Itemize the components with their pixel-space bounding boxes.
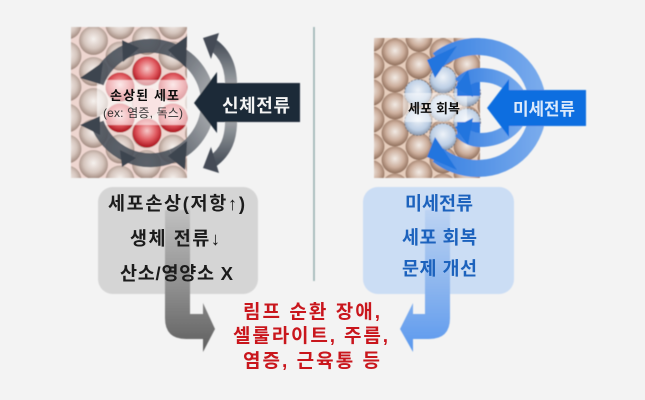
label backdrop [97, 80, 187, 125]
recovering cells [404, 66, 480, 150]
ring arrows dark [97, 46, 208, 160]
blue bands over cells [457, 82, 480, 134]
label: body current: 신체전류 [222, 96, 290, 116]
panel: damaged cell diagram [71, 27, 300, 178]
text: grey box list: 세포손상(저항↑) [108, 193, 245, 214]
panel: recovery diagram [374, 38, 586, 178]
blood flow arrow [194, 72, 300, 133]
text: red result [233, 301, 388, 372]
text: red result: 림프 순환 장애, [243, 301, 380, 323]
text: blue box list [402, 193, 477, 279]
text: grey box list [108, 193, 245, 284]
text: grey box list: 산소/영양소 X [120, 263, 234, 284]
cell lattice left [71, 27, 187, 178]
divider line [313, 27, 315, 281]
label: micro current: 미세전류 [513, 100, 575, 119]
label backdrop [403, 93, 467, 122]
damaged red cells [106, 56, 188, 148]
label: damaged cell: (ex: 염증, 독스) [103, 106, 183, 120]
label: damaged cell: 손상된 세포 [110, 88, 179, 103]
text: grey box list: 생체 전류↓ [130, 228, 220, 249]
text: blue box list: 세포 회복 [402, 227, 477, 248]
text: red result: 셀룰라이트, 주름, [233, 325, 388, 347]
text: red result: 염증, 근육통 등 [243, 350, 380, 372]
arrow: blue down to result [400, 210, 450, 352]
micro current arrow [487, 79, 586, 137]
text: blue box list: 문제 개선 [402, 258, 477, 279]
cell lattice right [374, 38, 480, 178]
outer arc arrows [212, 44, 231, 162]
panel: grey summary box [98, 187, 258, 294]
label: cell recovery: 세포 회복 [408, 101, 460, 116]
ring arrowheads [80, 36, 187, 170]
text: blue box list: 미세전류 [405, 193, 473, 214]
blue arrowheads [427, 46, 473, 170]
arrow: grey down to result [165, 210, 215, 352]
panel: blue summary box [363, 187, 514, 294]
label: damaged cell [103, 88, 183, 120]
blue arcs [438, 46, 538, 168]
